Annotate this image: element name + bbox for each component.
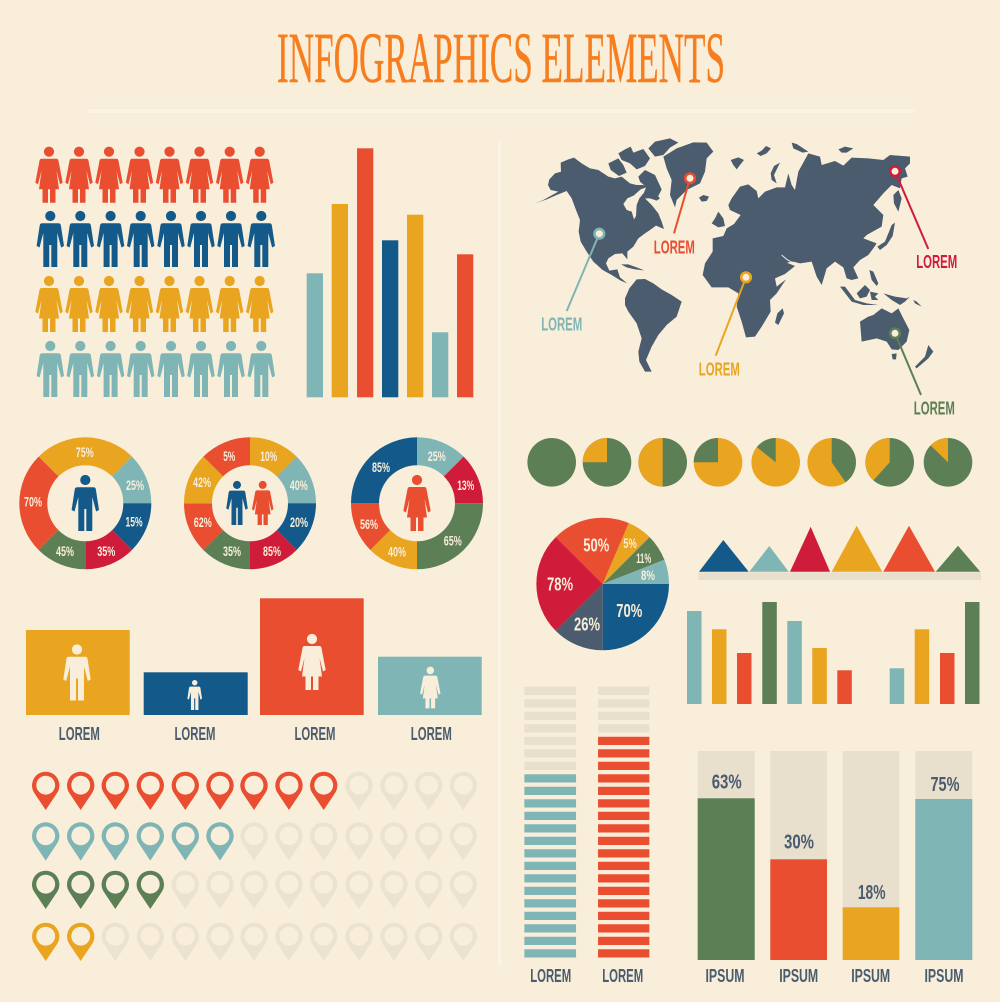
pie 3 [638,438,687,487]
percentage column: 30% [770,751,827,986]
large pie chart: 11% [636,551,651,566]
map marker: australia: LOREM [914,397,955,418]
map marker: africa [699,272,751,380]
pie 2 [583,438,631,487]
block labels [59,723,452,744]
donut chart: man and woman: 42% [193,475,211,490]
large pie chart: 26% [574,614,600,635]
map marker: russia [890,166,957,272]
new zealand [915,345,933,368]
donut chart: woman: 40% [388,544,406,560]
percentage column: 18%: 18% [858,882,886,904]
percentage column: 30%: IPSUM [779,965,818,986]
block: blue man [144,672,248,715]
percentage column: 63%: IPSUM [706,965,744,986]
row: blue men [37,211,275,267]
donut chart: man and woman: 62% [194,515,212,530]
large pie chart: 8% [641,568,655,583]
world map [535,138,933,372]
block: yellow man [26,630,130,715]
row: red women [35,147,273,203]
arctic islands [608,138,678,196]
donut chart: man and woman: 35% [223,544,241,559]
donut chart: woman: 65% [444,534,462,548]
block: red woman [260,598,364,715]
north america [535,158,664,283]
donut chart: man and woman [184,437,316,569]
map marker: australia [890,328,955,418]
japan [877,223,895,250]
pins row 4: 2 of 13 yellow [32,923,477,961]
percentage column: 63%: 63% [712,772,742,794]
pie 8 [924,438,972,487]
donut chart: man and woman: 20% [290,515,308,530]
greenland [663,142,713,207]
percentage column: 75% [915,751,972,986]
percentage column: 75%: 75% [930,774,960,796]
northern islands [757,143,853,183]
donut chart: man: 45% [56,544,74,559]
map marker: america [541,229,604,335]
pie 6 [807,438,856,487]
donut chart: man: 25% [126,478,144,493]
block labels: LOREM [294,723,336,744]
hudson bay [623,187,646,219]
pins row 2: 6 of 13 teal [32,822,477,861]
row: teal men [37,341,275,397]
pie 4 [694,438,742,487]
donut chart: woman: 13% [457,478,474,493]
northern atlantic island [731,157,744,169]
map marker: africa: LOREM [699,359,740,380]
donut chart: man and woman: 85% [263,544,281,559]
map pin rating grid [32,772,477,961]
tasmania [892,353,897,359]
triangle chart [698,526,981,580]
pie 7 [865,438,914,487]
donut chart: man and woman: 10% [260,449,277,464]
madagascar [775,308,784,325]
uk and ireland [712,212,725,227]
persian gulf [782,255,797,265]
large pie chart [536,518,669,650]
eurasia and africa [703,153,910,337]
block chart with people icons [26,598,482,744]
donut chart: woman: 85% [372,460,390,475]
donut chart: woman: 56% [360,517,378,532]
percentage column: 30%: 30% [784,832,814,854]
percentage column: 63% [698,751,755,986]
large pie chart: 78% [547,574,573,595]
south america [625,279,682,372]
donut chart: woman [351,437,483,569]
row of small pie charts [527,438,972,487]
block labels: LOREM [174,723,216,744]
row: yellow women [35,276,273,332]
block labels: LOREM [59,723,100,744]
donut chart: man: 75% [76,445,94,460]
block labels: LOREM [411,723,452,744]
percentage column: 75%: IPSUM [924,965,964,986]
pins row 1: 9 of 13 red [32,772,477,810]
map marker: greenland: LOREM [654,236,695,257]
pins row 3: 4 of 13 green [32,871,477,909]
striped progress bar: red: LOREM [602,965,643,986]
large pie chart: 70% [616,600,642,621]
iceland [699,195,709,202]
pie 1 [527,438,576,487]
percentage column: 18%: IPSUM [851,965,890,986]
cuba and caribbean [621,264,644,270]
donut chart: man [19,437,151,569]
large pie chart: 5% [623,536,637,551]
donut chart: man: 70% [24,494,42,510]
donut chart: woman: 25% [428,449,446,464]
striped progress bar: teal: LOREM [530,965,571,986]
donut chart: man: 15% [126,514,142,530]
donut chart: man and woman: 5% [223,449,235,464]
southeast asia islands [840,270,922,307]
grouped bar chart [687,602,980,704]
donut chart: man and woman: 40% [290,478,308,493]
bar chart: seven bars [307,148,473,397]
pie 5 [751,438,800,487]
percentage column: 18% [843,751,899,986]
large pie chart: 50% [583,534,609,555]
sakhalin [893,190,902,212]
donut chart: man: 35% [97,544,115,559]
block: teal woman [378,657,482,715]
map marker: america: LOREM [541,314,582,335]
map marker: greenland [654,174,695,257]
australia [860,308,909,350]
pictogram rows of people [35,147,275,397]
map marker: russia: LOREM [916,251,957,272]
